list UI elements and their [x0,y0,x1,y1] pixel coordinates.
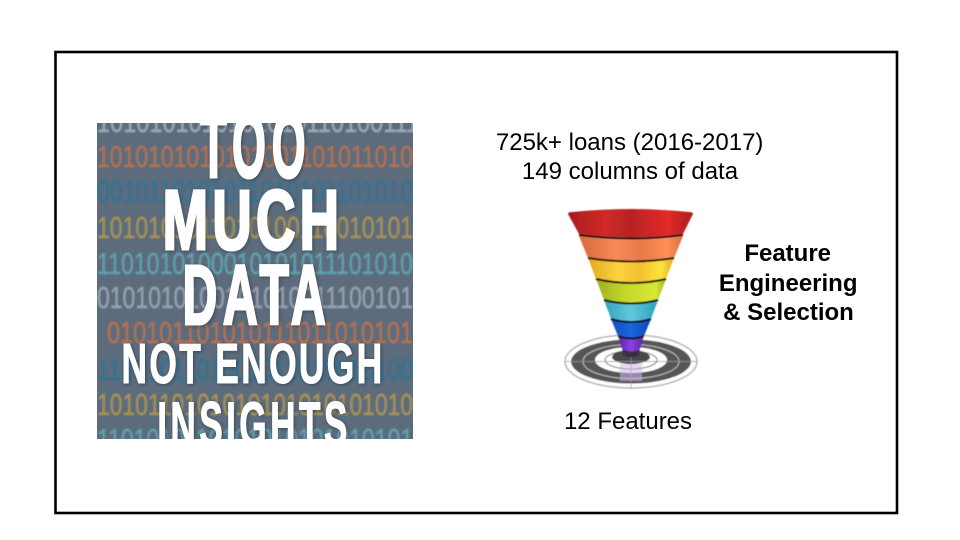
feature engineering label: Engineering [719,270,858,297]
teal band [604,300,658,322]
cover title lettering: DATA [183,249,331,342]
cover title lettering: MUCH [163,174,343,268]
binary digit rows: 1010101010101001101011010 [97,139,413,174]
target [565,335,697,388]
purple base [618,336,644,352]
binary digit rows: 1010110101010101010101010 [97,387,413,422]
slide border [56,52,897,513]
binary digit rows: 1100101101001011010010100 [97,352,413,387]
binary digit rows: 0101010100101010011100101 [97,280,413,315]
blue band [611,319,651,338]
12 features label: 12 Features [564,408,692,435]
binary digit rows [97,123,413,439]
binary digit rows: 010101101010111011010101 [107,315,413,350]
binary digit rows: 0010110101011010101101010 [97,174,413,209]
binary digit rows: 1010101010101010110100111 [97,104,419,139]
yellow band [588,258,674,283]
binary digit rows: 1010101011010100110010101 [97,210,413,245]
orange band [579,236,683,262]
red band [568,209,693,238]
slide [54,50,898,514]
binary digit rows: 1101010100010101011101010 [97,246,413,281]
band separators [579,235,683,338]
binary digit rows: 1101010110101010101010101 [97,422,413,457]
cover title lettering: INSIGHTS [157,389,351,460]
loans summary text: 149 columns of data [522,158,739,185]
icon: funnel over target [565,209,697,388]
cover title lettering: NOT ENOUGH [121,333,385,396]
feature engineering label: & Selection [723,299,854,326]
loans summary text: 725k+ loans (2016-2017) [496,129,763,156]
feature engineering label: Feature [744,240,831,267]
cover title lettering: TOO [200,95,312,197]
book cover image: too much data not enough insights [97,123,413,439]
lime band [596,279,666,304]
cover title lettering [123,123,383,439]
